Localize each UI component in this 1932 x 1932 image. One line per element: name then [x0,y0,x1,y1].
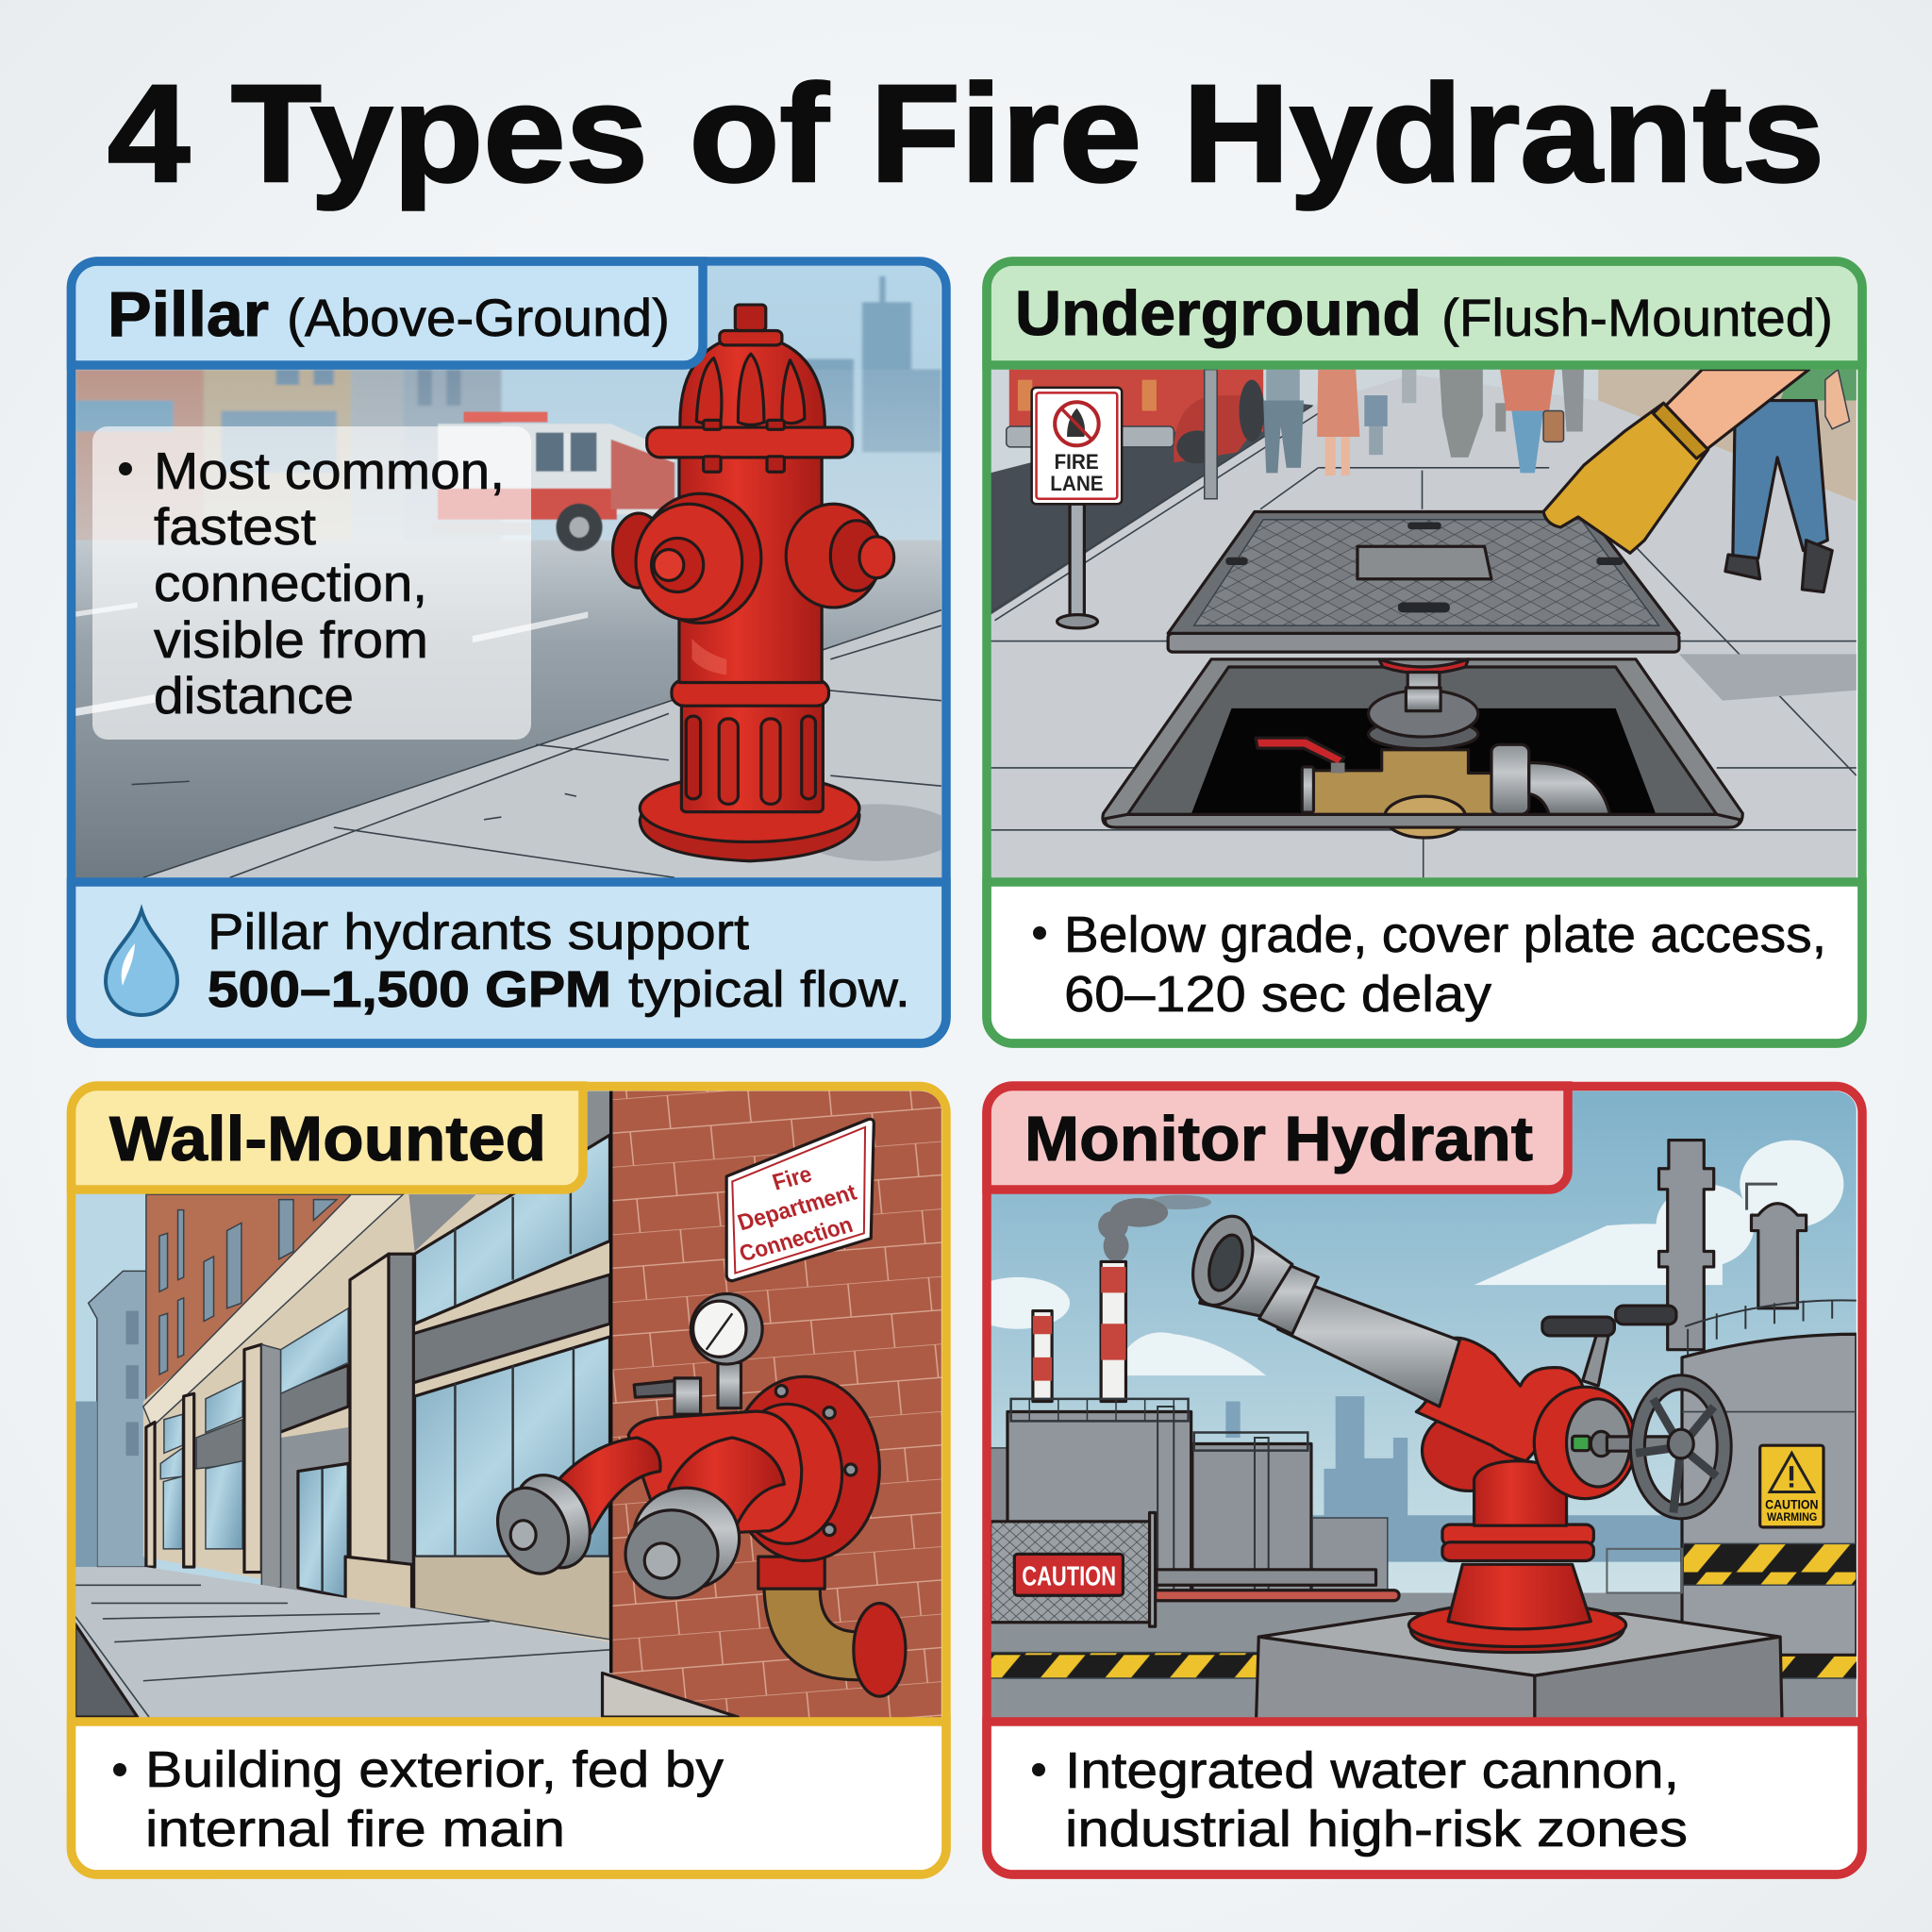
sidewalk [991,375,1857,877]
sign: fire department connection: Connection [737,1212,856,1267]
caution warning sign [1760,1445,1824,1527]
valve handle [634,1378,701,1414]
caption text: building exterior [113,1741,724,1857]
sign: fire department connection: Department [735,1180,860,1236]
fire truck [432,412,675,551]
fire lane sign: LANE [1050,472,1104,495]
hazard stripes ground [991,1653,1858,1678]
header tab: wall-mounted: Wall-Mounted [109,1104,546,1174]
pit front lip [1106,814,1740,827]
sidewalk [145,611,941,877]
caution fence: CAUTION [1022,1562,1116,1591]
header bar: underground: (Flush-Mounted) [1441,288,1833,347]
caption text: delay: Below grade, cover plate access, [1064,907,1826,963]
clouds [966,1141,1843,1375]
caption text: water cannon: Integrated water cannon, [1065,1742,1679,1799]
handle [1542,1306,1676,1386]
refinery towers [1659,1141,1807,1350]
pedestrians [1263,370,1857,591]
header tab: pillar: (Above-Ground) [287,288,670,347]
concrete base [1255,1613,1783,1769]
sign pole [1205,370,1217,499]
panel: monitor hydrant [966,1086,1862,1874]
panel: wall-mounted hydrant [72,1086,946,1874]
header tab: pillar: Pillar [108,279,269,350]
brick wall [611,1091,941,1764]
road [75,541,941,882]
fire lane sign: FIRE [1055,450,1099,474]
smoke [1098,1195,1211,1261]
illustration: sidewalk with cover plate [991,370,1857,877]
header bar: underground [987,261,1862,365]
arm and glove [1543,370,1809,553]
ground [991,1592,1857,1769]
caption text: flow [208,904,910,1018]
brick upper building [146,1194,403,1407]
frosted note: connection, [154,554,427,612]
water cannon [1183,1210,1671,1653]
caption text: delay [1033,907,1826,1023]
icon: water drop [106,910,177,1015]
cover plate [1168,511,1679,652]
header tab: monitor hydrant [987,1086,1568,1190]
sidewalk [75,1567,609,1800]
header tab: pillar [72,261,703,365]
illustration: street scene with pillar hydrant [75,266,941,877]
caption text: flow: Pillar hydrants support [208,904,749,960]
truck [1007,370,1264,463]
title: 4 Types of Fire Hydrants [108,57,1824,211]
pit [1103,659,1742,827]
lane markings [75,602,588,716]
caption band [987,882,1862,1043]
sign: fire department connection: Fire [770,1162,815,1195]
header tab: monitor hydrant: Monitor Hydrant [1024,1104,1533,1174]
illustration: industrial site with water cannon [966,1091,1858,1769]
caption text: building exterior: internal fire main [145,1801,565,1857]
handwheel [1636,1382,1724,1512]
sign: fire department connection [726,1119,874,1281]
storefront [143,1091,611,1644]
distant refinery [1225,1396,1682,1562]
panel: underground hydrant [987,261,1862,1043]
fire lane sign [1032,388,1122,628]
caption text: delay: 60–120 sec delay [1064,966,1491,1023]
frosted note: visible from [154,610,428,669]
panel: pillar hydrant [72,261,958,1043]
caption band [72,882,946,1043]
caution warning sign: WARMING [1767,1511,1817,1524]
gauge [691,1293,762,1408]
hydrant [613,305,894,861]
storage tanks [991,1399,1388,1598]
pipes [1126,1570,1399,1601]
road [991,401,1318,615]
caption text: building exterior: Building exterior, fed by [145,1741,724,1798]
frosted note [92,426,531,740]
caption band [987,1722,1862,1874]
caption text: flow: typical flow. [628,961,910,1018]
right tank [1607,1300,1857,1655]
header tab: wall-mounted [72,1086,583,1190]
caption band [72,1722,946,1874]
illustration: building facade with wall hydrant [75,1091,941,1800]
frosted note: distance [154,666,354,724]
frosted note: Most common, [154,441,505,500]
caption text: water cannon: industrial high-risk zones [1065,1801,1688,1857]
wall hydrant body [486,1376,906,1696]
caution warning sign: CAUTION [1765,1498,1818,1512]
caution fence [991,1512,1156,1626]
caption text: flow: 500–1,500 GPM [208,961,611,1018]
caption text: water cannon [1032,1742,1688,1857]
frosted note: fastest [154,497,316,556]
valve assembly [1256,659,1609,838]
header bar: underground: Underground [1015,278,1422,349]
chimneys [1033,1261,1125,1402]
